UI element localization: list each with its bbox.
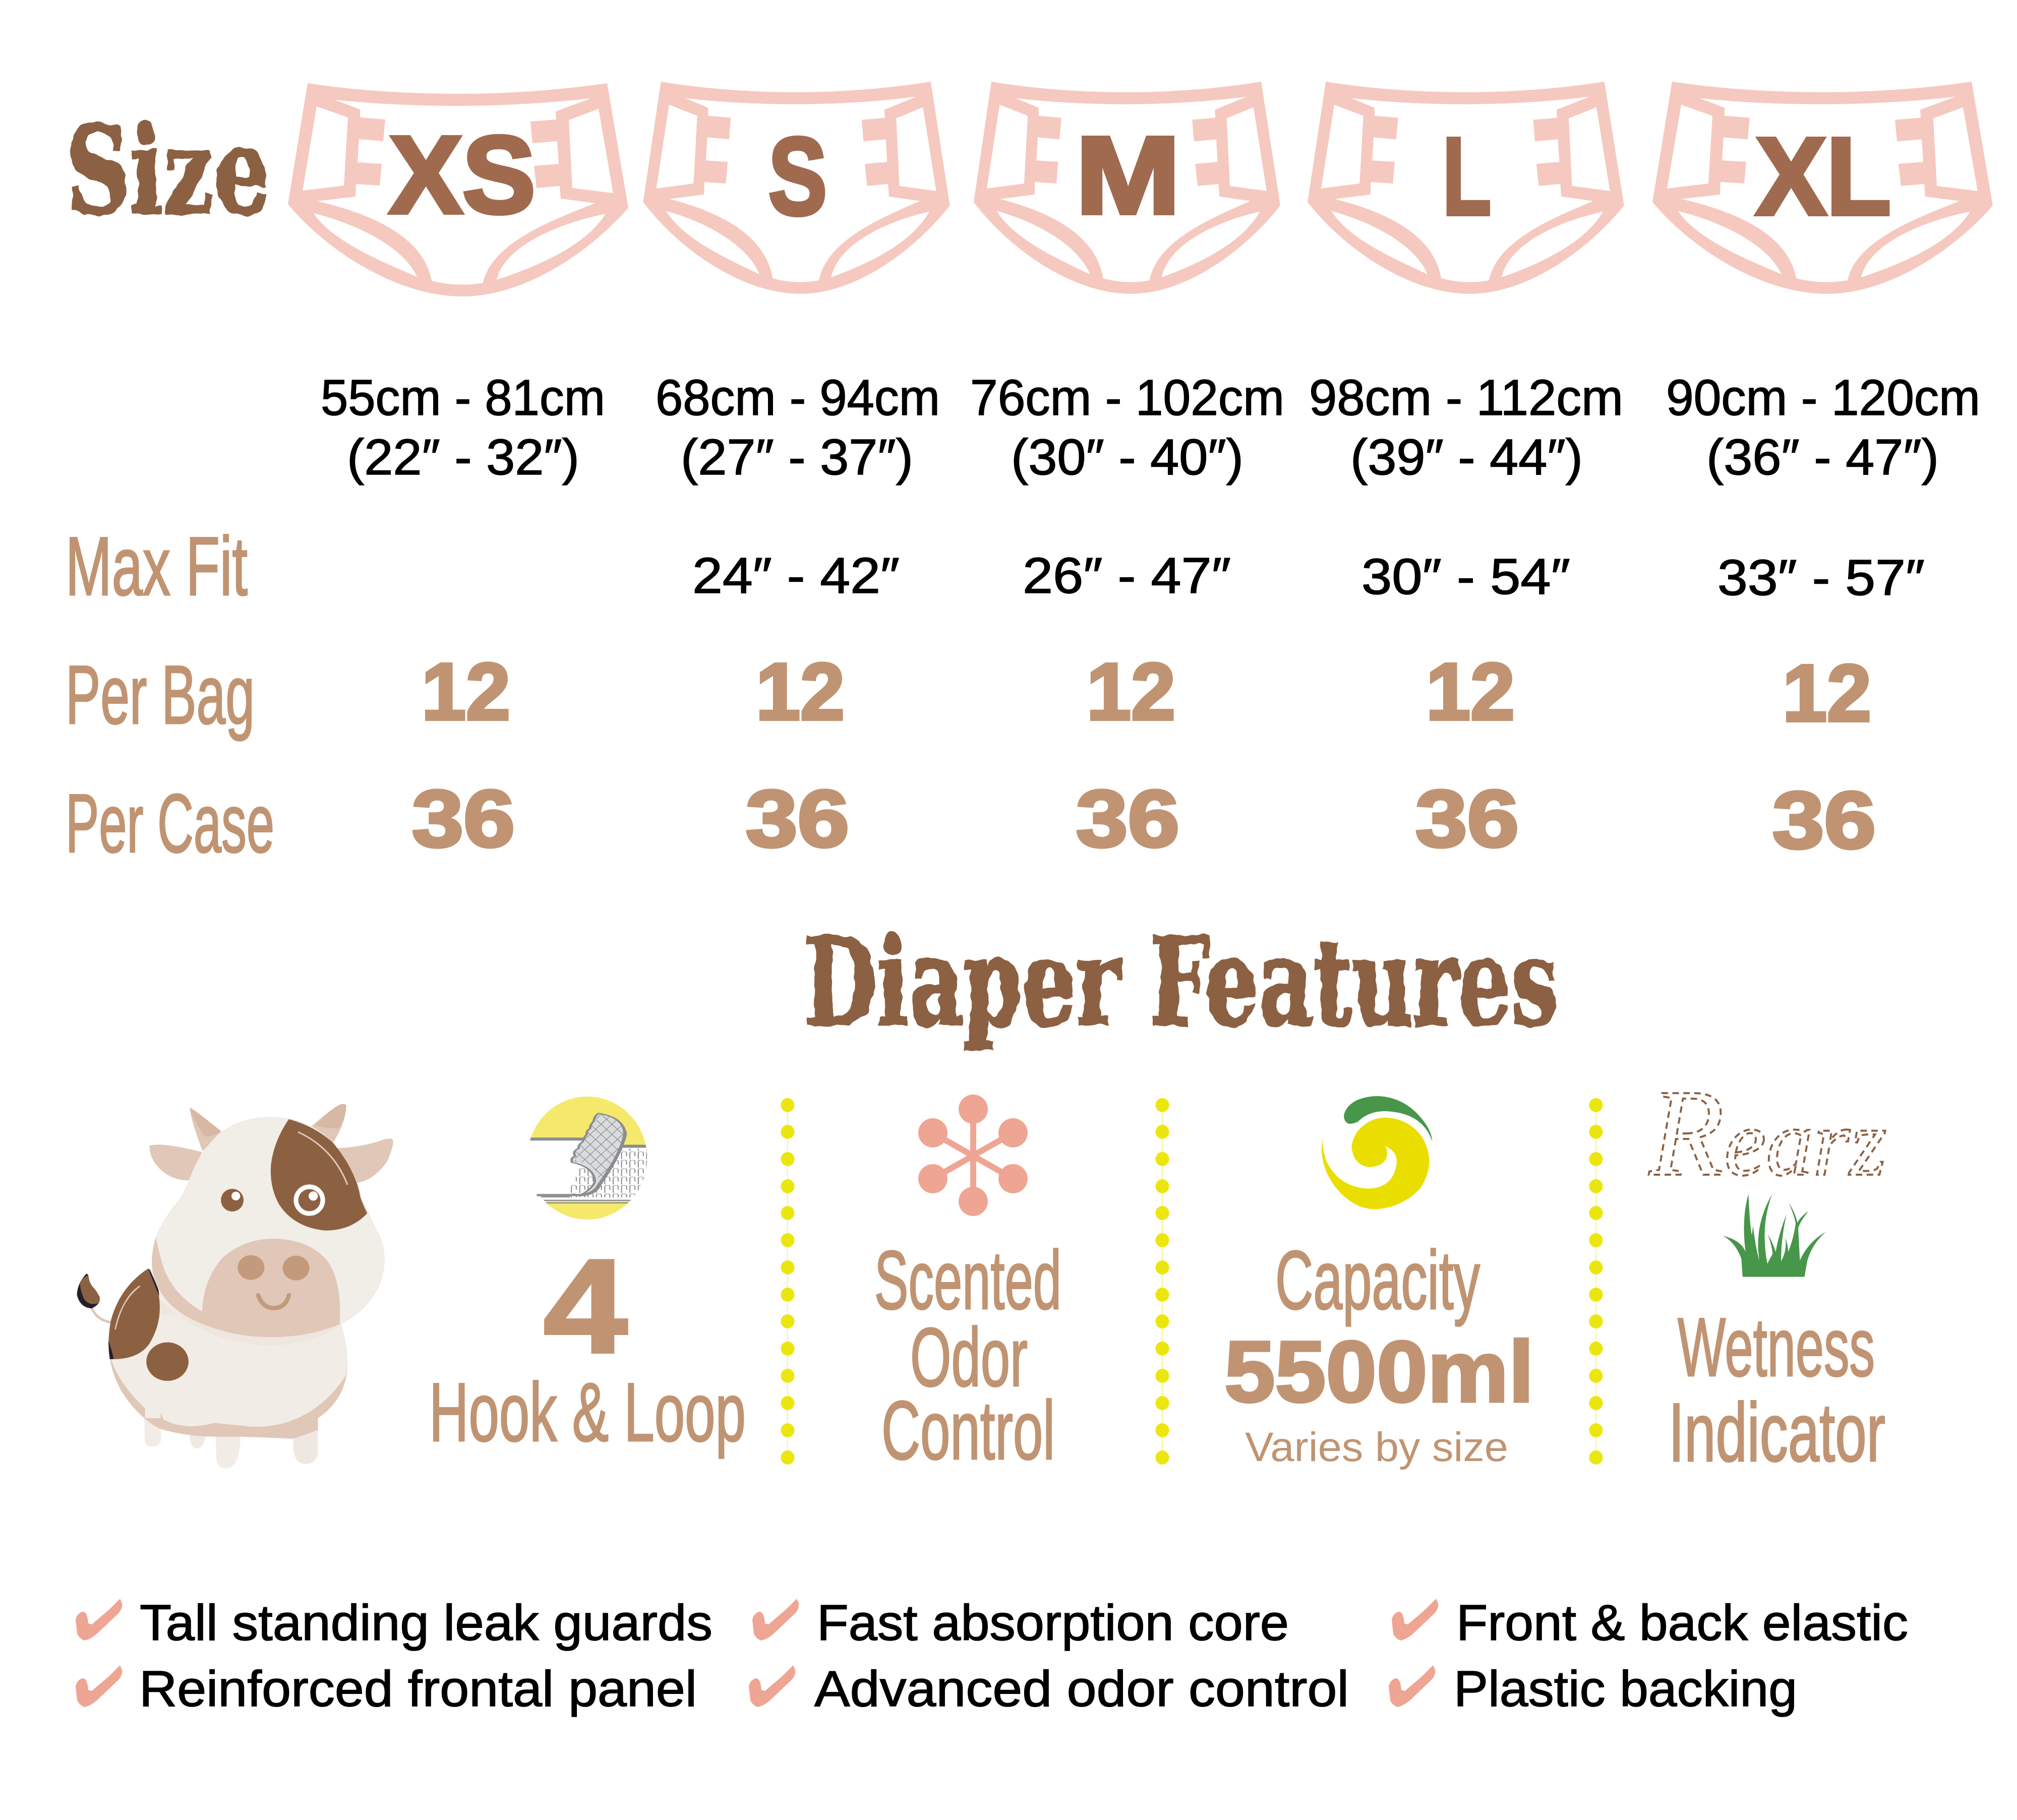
- heading: Diaper Features: Diaper Features: [804, 911, 1559, 1053]
- cow head: [152, 1117, 385, 1337]
- checklist column 2: Fast absorption core: [817, 1595, 1289, 1651]
- row: Per Case: 36: [412, 773, 515, 864]
- row: Per Case: 36: [1076, 773, 1179, 864]
- divider dots 1: [781, 1098, 795, 1465]
- feature: Wetness Indicator: Wetness: [1678, 1301, 1875, 1393]
- checklist column 3: Plastic backing: [1454, 1661, 1797, 1717]
- waist measurements row: (30″ - 40″): [1011, 429, 1243, 486]
- size XL diaper: [1652, 82, 1993, 294]
- divider dots 2: [1156, 1098, 1169, 1465]
- divider dots 3: [1589, 1098, 1603, 1465]
- row: Max Fit: 30″ - 54″: [1361, 549, 1570, 605]
- feature: Wetness Indicator: [1669, 1301, 1885, 1479]
- checklist column 1: [76, 1595, 713, 1717]
- cow legs: [144, 1403, 318, 1468]
- row: Max Fit: [66, 520, 1925, 613]
- feature: 4 Hook and Loop: 4: [544, 1232, 628, 1380]
- row: Max Fit: Max Fit: [66, 520, 248, 613]
- icon: absorbency swirl: [1322, 1096, 1432, 1209]
- logo: Rearz dashed script: Rearz: [1648, 1064, 1886, 1202]
- feature: Scented Odor Control: Scented: [874, 1234, 1061, 1326]
- cow tail: [77, 1273, 112, 1322]
- cow body: [109, 1269, 347, 1439]
- size XL diaper: XL: [1756, 115, 1891, 238]
- waist measurements row: [321, 370, 1980, 486]
- feature: 4 Hook and Loop: [429, 1232, 746, 1459]
- checklist column 3: [1389, 1595, 1908, 1717]
- feature: Capacity 5500ml: [1224, 1234, 1534, 1470]
- checklist column 2: [749, 1595, 1349, 1717]
- row: Per Bag: 12: [1087, 646, 1175, 737]
- waist measurements row: 68cm - 94cm: [656, 370, 940, 426]
- icon: hook and loop: [524, 1097, 649, 1220]
- icon: scent asterisk: [918, 1095, 1028, 1216]
- row: Per Bag: Per Bag: [66, 648, 255, 741]
- row: Max Fit: 33″ - 57″: [1717, 550, 1925, 606]
- size M diaper: [974, 82, 1280, 294]
- row: Per Case: Per Case: [66, 777, 274, 870]
- cow eyes: [221, 1187, 323, 1214]
- size XS diaper: [288, 83, 628, 296]
- waist measurements row: 55cm - 81cm: [321, 370, 605, 426]
- row: Per Case: 36: [746, 773, 849, 864]
- row: Max Fit: 24″ - 42″: [692, 548, 900, 604]
- feature: Capacity 5500ml: Varies by size: [1245, 1424, 1508, 1470]
- waist measurements row: 90cm - 120cm: [1666, 370, 1980, 426]
- size L diaper: L: [1443, 115, 1491, 238]
- checklist column 1: Tall standing leak guards: [140, 1595, 713, 1651]
- waist measurements row: (22″ - 32″): [347, 429, 579, 486]
- row: Per Bag: 12: [756, 646, 845, 737]
- feature: Capacity 5500ml: Capacity: [1275, 1234, 1480, 1326]
- cow mascot: [77, 1104, 393, 1468]
- waist measurements row: (27″ - 37″): [681, 429, 913, 486]
- waist measurements row: (36″ - 47″): [1706, 429, 1939, 486]
- checklist column 1: Reinforced frontal panel: [139, 1661, 697, 1717]
- size L diaper: [1308, 82, 1624, 294]
- cow ears: [149, 1138, 393, 1183]
- feature: Scented Odor Control: [874, 1234, 1061, 1477]
- checklist column 3: Front & back elastic: [1456, 1595, 1908, 1651]
- checklist column 2: Advanced odor control: [814, 1661, 1349, 1717]
- row: Per Bag: 12: [1426, 646, 1515, 737]
- row: Per Bag: 12: [1783, 648, 1871, 738]
- row: Per Case: [66, 773, 1876, 870]
- waist measurements row: (39″ - 44″): [1350, 429, 1583, 486]
- cow body patches: [108, 1268, 189, 1381]
- waist measurements row: 76cm - 102cm: [970, 370, 1284, 426]
- icon: grass: [1723, 1194, 1826, 1277]
- feature: Scented Odor Control: Control: [881, 1384, 1055, 1477]
- feature: Wetness Indicator: Indicator: [1669, 1386, 1885, 1479]
- row: Per Bag: [66, 646, 1871, 741]
- row: Per Case: 36: [1415, 773, 1519, 864]
- size M diaper: M: [1076, 114, 1180, 237]
- cow horns: [190, 1104, 346, 1151]
- row: Per Bag: 12: [422, 646, 510, 737]
- size S diaper: S: [768, 115, 827, 238]
- feature: Scented Odor Control: Odor: [910, 1311, 1028, 1404]
- size S diaper: [643, 82, 950, 294]
- feature: 4 Hook and Loop: Hook & Loop: [429, 1366, 746, 1459]
- feature: Capacity 5500ml: 5500ml: [1224, 1323, 1534, 1420]
- heading: Size: Size: [66, 100, 270, 242]
- waist measurements row: 98cm - 112cm: [1309, 370, 1623, 426]
- row: Per Case: 36: [1772, 775, 1876, 865]
- row: Max Fit: 26″ - 47″: [1023, 548, 1231, 604]
- size XS diaper: XS: [389, 114, 536, 236]
